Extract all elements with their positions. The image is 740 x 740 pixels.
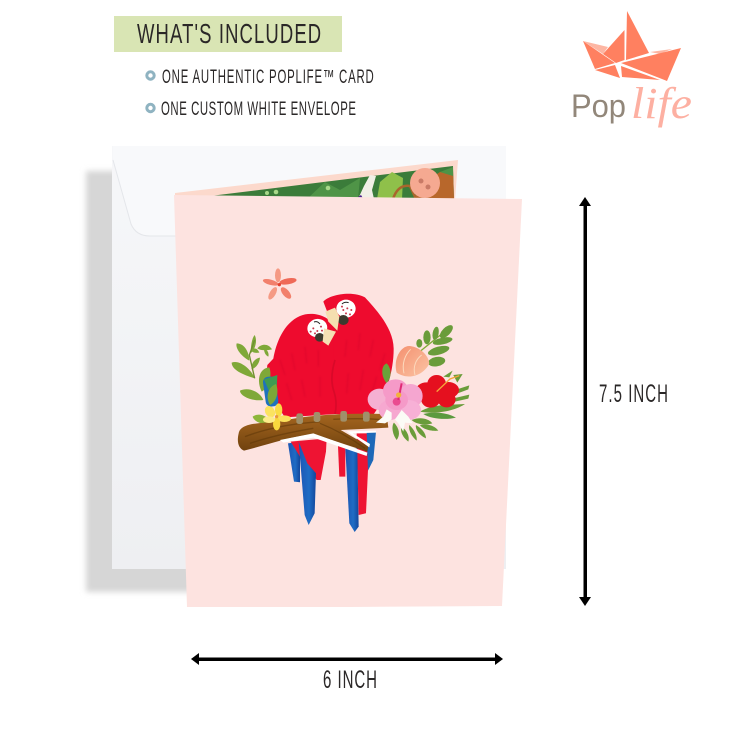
flower: pink hibiscus: [368, 379, 423, 420]
pink card front: [174, 195, 522, 607]
list item: authentic card: ONE AUTHENTIC POPLIFE™ CARD: [162, 67, 374, 88]
parrot bodies: [267, 294, 394, 417]
flower: yellow: [263, 403, 291, 430]
heading: what's included: [114, 16, 342, 52]
parrot beaks: [315, 333, 324, 342]
parrot claws: [296, 411, 370, 424]
leaves right: [382, 323, 469, 442]
logo wordmark: life: life: [631, 79, 692, 128]
parrot faces: [305, 317, 329, 339]
feather shading: [280, 333, 385, 400]
heading: what's included: WHAT'S INCLUDED: [137, 19, 321, 50]
leaves left: [232, 335, 279, 424]
parrot tails: [288, 432, 376, 532]
envelope flap: [113, 146, 506, 236]
arrow: width: [191, 653, 503, 665]
inner card peeking out: [175, 160, 458, 200]
arrow: height: [579, 197, 591, 606]
flower: floating blossom: [262, 268, 297, 301]
envelope with shadow: [86, 146, 506, 592]
flower: peach protea: [396, 346, 429, 376]
list item: white envelope: ONE CUSTOM WHITE ENVELOPE: [161, 99, 356, 120]
branch: [238, 411, 388, 456]
label: 7.5 inch: 7.5 INCH: [599, 380, 668, 408]
flower: white blossoms: [376, 409, 413, 432]
illustration: parrots on a branch: [232, 268, 469, 532]
logo: poplife boat: [571, 11, 692, 128]
logo wordmark: pop: Pop: [571, 88, 626, 124]
label: 6 inch: 6 INCH: [323, 666, 377, 694]
flower: red hibiscus: [415, 375, 459, 408]
